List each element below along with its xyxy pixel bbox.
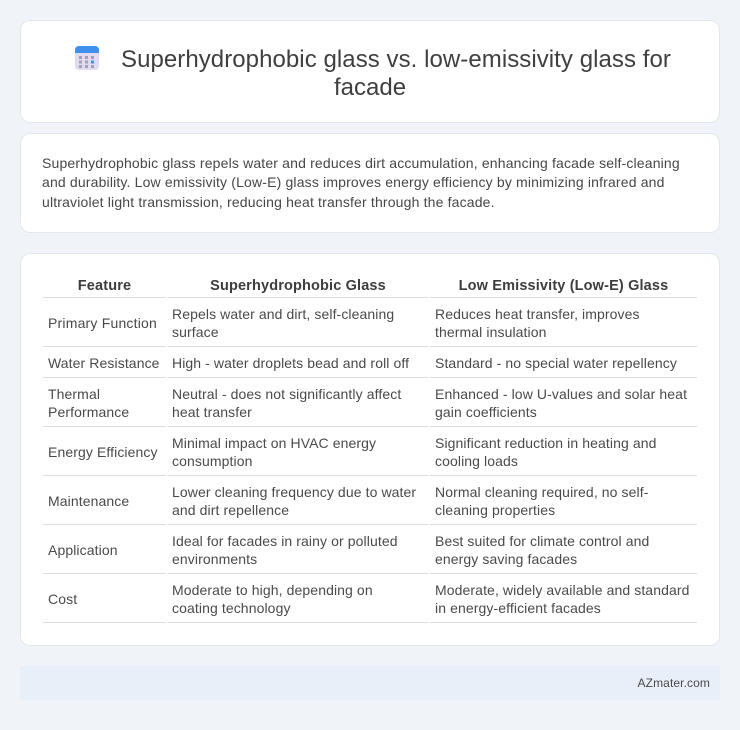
row: thermal performance <box>48 386 687 420</box>
row: energy efficiency: Significant reduction in heating and <box>435 435 657 451</box>
row: maintenance: cleaning properties <box>435 502 555 518</box>
row: application: environments <box>172 551 257 567</box>
row: thermal performance: Neutral - does not significantly affect <box>172 386 401 402</box>
row: cost <box>48 582 690 616</box>
row: energy efficiency: Minimal impact on HVAC energy <box>172 435 376 451</box>
table header <box>78 278 668 294</box>
row: maintenance: and dirt repellence <box>172 502 289 518</box>
row: energy efficiency <box>48 435 657 469</box>
row: application: energy saving facades <box>435 551 577 567</box>
row: cost: Moderate, widely available and standard <box>435 582 690 598</box>
row: maintenance: Normal cleaning required, no self- <box>435 484 649 500</box>
row: primary function: Primary Function <box>48 315 157 331</box>
row: water resistance: Water Resistance <box>48 355 160 371</box>
row: application: Ideal for facades in rainy or polluted <box>172 533 398 549</box>
panel: title card: Superhydrophobic glass vs. low-emissivity glass for <box>121 46 671 73</box>
table header: Feature <box>78 278 131 294</box>
description text: and durability. Low emissivity (Low-E) glass improves energy efficiency by minimizing infrared and <box>42 174 665 190</box>
row: thermal performance: Thermal <box>48 386 100 402</box>
description text: ultraviolet light transmission, reducing heat transfer through the facade. <box>42 194 495 210</box>
row: primary function: Reduces heat transfer, improves <box>435 306 640 322</box>
row: application: Best suited for climate control and <box>435 533 649 549</box>
footer bar <box>20 666 720 700</box>
icon: calendar grid <box>75 46 99 70</box>
table header: Low Emissivity (Low-E) Glass <box>459 278 668 294</box>
row: primary function: Repels water and dirt, self-cleaning <box>172 306 394 322</box>
row: cost: coating technology <box>172 600 291 616</box>
row: primary function: thermal insulation <box>435 324 547 340</box>
title <box>121 46 671 101</box>
panel: title card: facade <box>334 74 406 101</box>
row: water resistance <box>48 355 677 371</box>
row: energy efficiency: consumption <box>172 453 252 469</box>
row: cost: Cost <box>48 591 77 607</box>
row: maintenance <box>48 484 649 518</box>
footer brand text: AZmater.com <box>638 676 710 690</box>
row: thermal performance: Performance <box>48 404 129 420</box>
row: water resistance: Standard - no special water repellency <box>435 355 677 371</box>
row: thermal performance: gain coefficients <box>435 404 537 420</box>
row: energy efficiency: Energy Efficiency <box>48 444 158 460</box>
row: application: Application <box>48 542 118 558</box>
row: application <box>48 533 649 567</box>
panel: title card <box>20 20 720 123</box>
row: maintenance: Maintenance <box>48 493 129 509</box>
row: maintenance: Lower cleaning frequency due to water <box>172 484 416 500</box>
row: cost: in energy-efficient facades <box>435 600 601 616</box>
row: primary function: surface <box>172 324 219 340</box>
table header: Superhydrophobic Glass <box>210 278 386 294</box>
panel: description <box>20 133 720 233</box>
row: thermal performance: heat transfer <box>172 404 252 420</box>
description text <box>42 155 680 210</box>
row: energy efficiency: cooling loads <box>435 453 518 469</box>
row: cost: Moderate to high, depending on <box>172 582 373 598</box>
row: primary function <box>48 306 640 340</box>
panel: comparison table <box>20 253 720 646</box>
row: water resistance: High - water droplets bead and roll off <box>172 355 409 371</box>
row: thermal performance: Enhanced - low U-values and solar heat <box>435 386 687 402</box>
description text: Superhydrophobic glass repels water and reduces dirt accumulation, enhancing facade self-cleaning <box>42 155 680 171</box>
